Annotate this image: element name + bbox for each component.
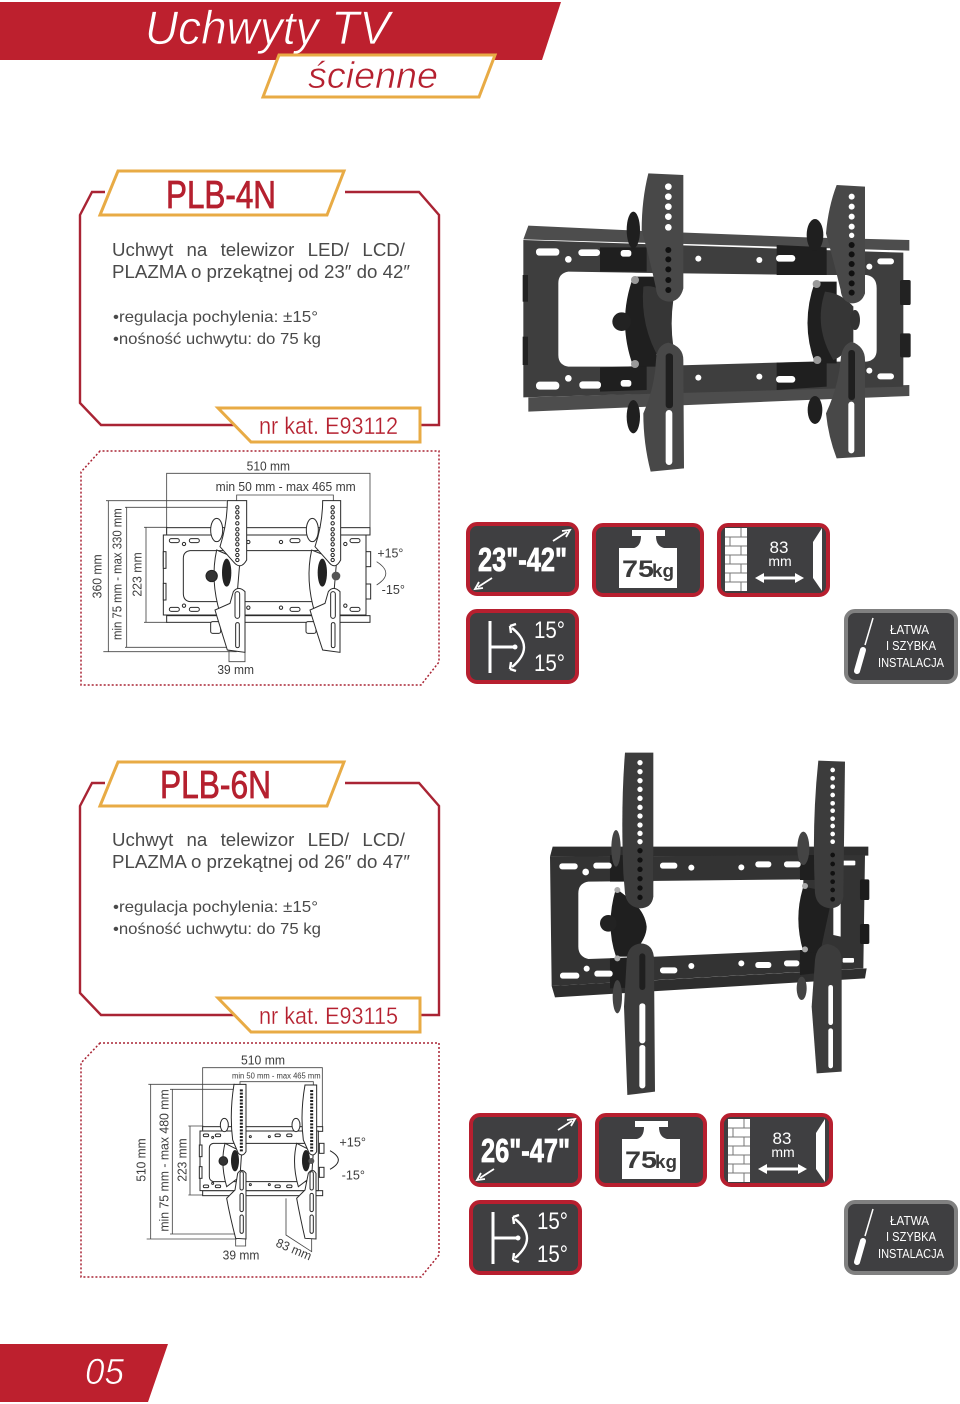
icon: easy installation: ŁATWA — [890, 1213, 929, 1228]
panel: PLB-4N technical drawing — [81, 451, 439, 685]
feature bullets — [113, 899, 321, 938]
product photo: PLB-4N mount — [523, 173, 911, 472]
icon: easy installation: INSTALACJA — [878, 655, 944, 670]
panel: PLB-6N description — [80, 762, 439, 1032]
icon: screen size — [471, 1115, 580, 1185]
catalogue number — [218, 408, 420, 442]
model heading: PLB-4N — [166, 174, 276, 217]
icon: tilt range: 15° — [537, 1241, 568, 1268]
icon: screen size: 26"-47" — [481, 1132, 570, 1169]
icon: weight capacity — [597, 1115, 705, 1185]
panel frame — [80, 192, 439, 425]
page number banner — [0, 1344, 168, 1402]
icon: easy installation — [846, 611, 956, 682]
icon: easy installation — [846, 1202, 956, 1273]
dimension drawing: 510 mm — [241, 1053, 285, 1067]
model heading — [100, 171, 344, 217]
panel: PLB-6N technical drawing — [81, 1043, 439, 1277]
icon group: PLB-4N specifications — [468, 524, 956, 682]
feature bullets: •regulacja pochylenia: ±15° — [113, 899, 318, 916]
dotted frame — [81, 1043, 439, 1277]
feature bullets: •regulacja pochylenia: ±15° — [113, 309, 318, 326]
icon: weight capacity: kg — [652, 561, 674, 581]
icon: wall distance — [719, 525, 828, 595]
dimension drawing: 83 mm — [274, 1236, 314, 1263]
dimension drawing: 223 mm — [131, 552, 145, 597]
icon group: PLB-6N specifications — [471, 1115, 956, 1273]
dimension drawing: 223 mm — [176, 1138, 190, 1182]
icon: weight capacity: 75 — [622, 556, 654, 583]
page number banner: 05 — [85, 1351, 125, 1392]
description text: PLAZMA o przekątnej od 23″ do 42″ — [112, 261, 410, 282]
dimension drawing: 510 mm — [135, 1138, 149, 1182]
icon: wall distance: mm — [771, 1144, 795, 1160]
icon: weight capacity — [594, 525, 702, 595]
model heading — [100, 762, 344, 807]
feature bullets — [113, 309, 321, 348]
icon: tilt range: 15° — [534, 617, 565, 644]
product photo: PLB-6N mount — [550, 753, 869, 1095]
feature bullets: •nośność uchwytu: do 75 kg — [113, 331, 321, 348]
icon: tilt range: 15° — [534, 650, 565, 677]
dimension drawing: 510 mm — [247, 460, 290, 474]
description text — [112, 239, 410, 282]
catalogue number — [218, 998, 420, 1032]
description text: Uchwyt na telewizor LED/ LCD/ — [112, 829, 406, 850]
description text: Uchwyt na telewizor LED/ LCD/ — [112, 239, 406, 260]
dimension drawing: +15° — [339, 1136, 366, 1150]
subtitle tag: ścienne — [308, 55, 438, 96]
dimension drawing: min 50 mm - max 465 mm — [216, 480, 356, 494]
description text — [112, 829, 410, 872]
dimension drawing — [91, 460, 405, 677]
dimension drawing: -15° — [342, 1168, 365, 1182]
icon: easy installation: INSTALACJA — [878, 1246, 944, 1261]
icon: wall distance: mm — [768, 553, 792, 569]
model heading: PLB-6N — [160, 764, 271, 807]
dimension drawing: -15° — [382, 583, 405, 597]
icon: easy installation: ŁATWA — [890, 622, 929, 637]
dotted frame — [81, 451, 439, 685]
icon: easy installation: I SZYBKA — [886, 638, 936, 653]
dimension drawing — [135, 1053, 366, 1263]
dimension drawing: 39 mm — [223, 1248, 259, 1262]
icon: tilt range — [471, 1202, 580, 1273]
icon: wall distance — [722, 1115, 831, 1185]
header banner: Uchwyty TV — [145, 1, 394, 54]
dimension drawing: +15° — [377, 546, 403, 560]
icon: weight capacity: kg — [655, 1152, 677, 1172]
feature bullets: •nośność uchwytu: do 75 kg — [113, 921, 321, 938]
dimension drawing: min 75 mm - max 480 mm — [157, 1089, 171, 1232]
icon: wall distance: 83 — [773, 1129, 791, 1148]
icon: screen size — [468, 524, 577, 594]
subtitle tag — [263, 55, 495, 97]
description text: PLAZMA o przekątnej od 26″ do 47″ — [112, 851, 410, 872]
icon: tilt range: 15° — [537, 1208, 568, 1235]
dimension drawing: min 50 mm - max 465 mm — [232, 1072, 321, 1081]
header banner — [0, 1, 561, 60]
icon: wall distance: 83 — [770, 538, 788, 557]
dimension drawing: 360 mm — [91, 554, 105, 598]
icon: tilt range — [468, 611, 577, 682]
catalogue number: nr kat. E93112 — [259, 413, 398, 440]
icon: screen size: 23"-42" — [478, 541, 567, 578]
catalogue number: nr kat. E93115 — [259, 1003, 398, 1030]
dimension drawing: min 75 mm - max 330 mm — [111, 508, 125, 640]
icon: easy installation: I SZYBKA — [886, 1229, 936, 1244]
icon: weight capacity: 75 — [625, 1147, 657, 1174]
panel frame — [80, 783, 439, 1015]
panel: PLB-4N description — [80, 171, 439, 442]
dimension drawing: 39 mm — [217, 663, 254, 677]
